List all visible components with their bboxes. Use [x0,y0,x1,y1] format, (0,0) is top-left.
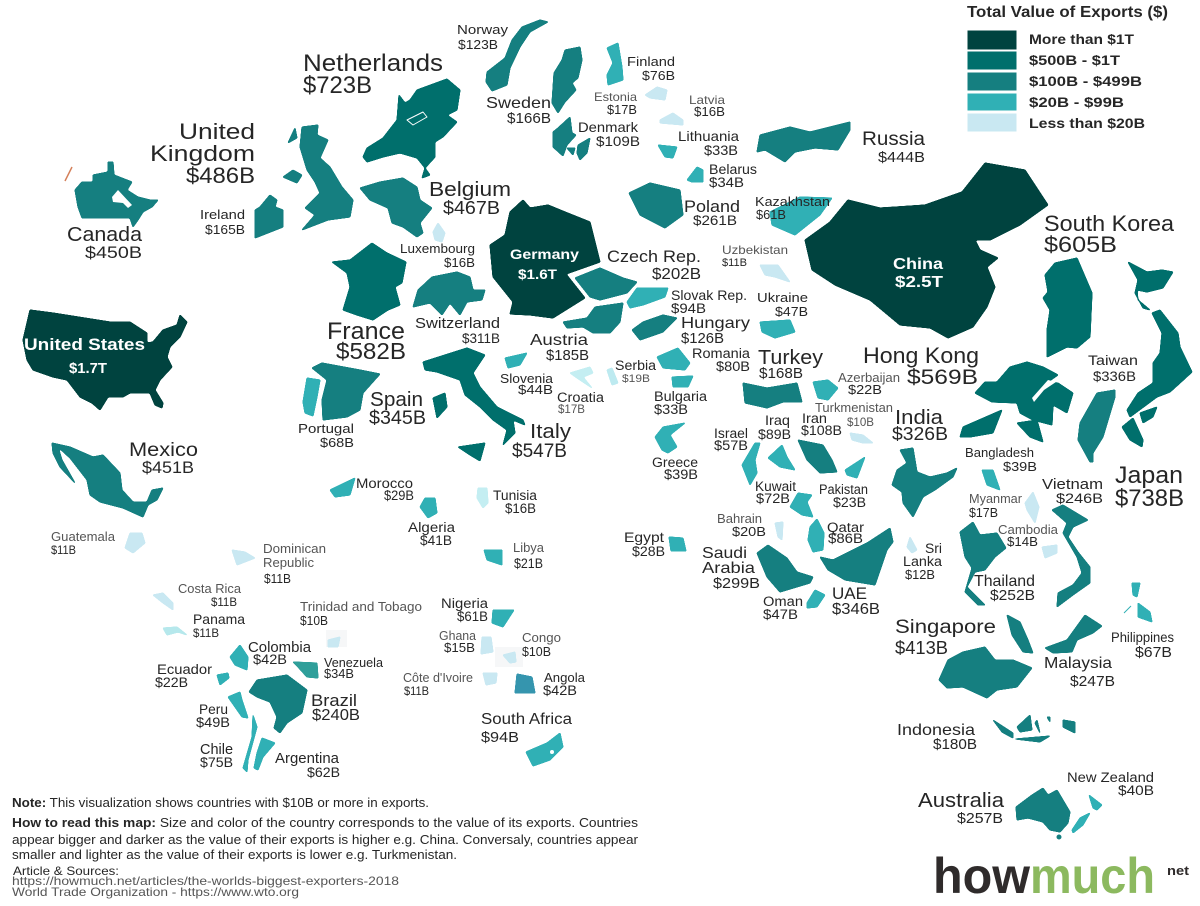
country: Australia: Australia [918,790,1005,812]
country: Poland: $261B [693,212,737,228]
country: Poland [629,183,740,228]
country: Ghana: Ghana [439,629,476,643]
country: Turkey [743,347,823,408]
country: Canada: Canada [67,224,143,246]
country: Thailand: Thailand [974,573,1035,590]
country: Brazil: Brazil [311,691,357,710]
country: Netherlands: $723B [303,72,372,99]
country: Algeria [408,498,456,548]
country: Belarus: Belarus [709,162,757,177]
country: Luxembourg: $16B [444,255,475,270]
country: Bangladesh [965,445,1037,490]
legend [967,4,1168,131]
country: Ukraine: $47B [775,304,808,319]
how to read this map: smaller and lighter as the value of their exports is lower e.g. Turkmenistan. [12,848,457,862]
country: Bulgaria: $33B [654,402,688,417]
country: Libya: $21B [514,556,543,571]
country: Venezuela: Venezuela [324,655,384,670]
country: Indonesia: Indonesia [897,722,975,739]
country: New Zealand: $40B [1118,783,1154,798]
country: Ghana: $15B [444,640,475,655]
country: Sri Lanka: $12B [905,567,935,582]
country: Turkmenistan: $10B [847,415,874,429]
country: Sweden: $166B [507,110,551,127]
country: Mexico [52,440,198,517]
country: Romania: $80B [716,359,750,374]
country: Azerbaijan: Azerbaijan [838,371,900,385]
legend: $500B - $1T [1029,53,1121,68]
country: Bahrain: $20B [732,524,766,539]
country: Netherlands [303,50,460,178]
country: Sweden: Sweden [486,95,551,112]
country: China: China [893,256,943,273]
country: Czech Republic: Czech Rep. [607,248,701,266]
country: Japan: $738B [1115,485,1184,512]
country: Slovenia: $44B [518,382,553,397]
country: Canada [65,162,158,262]
country: Iran [798,410,842,473]
country: Belarus [687,162,757,190]
country: Philippines: Philippines [1111,630,1174,645]
country: Dominican Republic: $11B [264,572,291,586]
country: Hong Kong [863,343,1073,442]
country: Nigeria: Nigeria [441,596,489,611]
country: Congo: $10B [522,644,551,659]
country: Turkey: Turkey [758,347,823,369]
country: Kazakhstan: Kazakhstan [755,194,830,209]
country: Czech Republic [575,248,701,300]
country: Ukraine [757,290,808,338]
country: Russia [757,122,925,166]
country: Latvia: Latvia [689,93,725,107]
country: Kuwait [755,479,813,517]
country: Congo [495,631,561,667]
country: Egypt: Egypt [624,529,664,545]
country: Lithuania: Lithuania [678,128,739,144]
country: Colombia: Colombia [248,640,312,656]
country: Malaysia: $247B [1070,673,1115,690]
country: Hong Kong: $569B [907,366,978,389]
country: China [805,163,1048,338]
country: Côte d'Ivoire: $11B [404,684,429,698]
country: Dominican Republic: Republic [263,556,314,570]
country: Kuwait: Kuwait [755,479,796,494]
country: Ghana [439,629,493,655]
country: Brazil: $240B [312,707,360,724]
country: Norway: Norway [457,22,509,37]
country: Poland: Poland [684,197,740,216]
country: United Kingdom [150,119,353,230]
country: South Korea: South Korea [1044,211,1175,236]
country: Colombia: $42B [253,651,287,667]
country: South Africa [481,711,572,766]
country: Cambodia: $14B [1007,534,1038,549]
logo: howmuch.net [933,848,1190,904]
country: Argentina: Argentina [275,751,340,767]
country: Saudi Arabia [702,545,813,592]
country: Libya [484,541,544,571]
country: Indonesia [897,715,1075,753]
country: Russia: $444B [878,149,925,166]
country: Venezuela [293,655,384,681]
country: Ukraine: Ukraine [757,290,808,305]
country: Luxembourg [400,223,475,270]
country: Sri Lanka [903,537,943,582]
legend: Less than $20B [1029,116,1145,131]
country: Latvia: $16B [694,104,725,119]
country: Hungary: $126B [681,330,724,347]
country: Germany: Germany [510,246,579,262]
country: Nigeria [441,596,514,627]
country: Belarus: $34B [709,175,744,190]
country: Tunisia [477,488,537,516]
country: Canada: $450B [85,243,142,262]
country: Morocco [330,476,414,503]
country: Japan [1115,262,1192,512]
country: Philippines: $67B [1135,644,1172,661]
country: Qatar: Qatar [827,520,865,535]
country: Greece [652,423,698,482]
legend: $100B - $499B [1029,74,1142,89]
country: Bulgaria: Bulgaria [654,389,708,404]
country: Pakistan [819,457,868,510]
country: Cambodia: Cambodia [998,522,1059,537]
country: Austria: $185B [546,347,589,364]
country: Myanmar [969,491,1039,523]
country: Tunisia: $16B [505,501,536,516]
country: Saudi Arabia: Saudi [702,545,747,562]
country: Kazakhstan [755,194,832,235]
country: Iraq: Iraq [765,412,790,428]
country: Malaysia [1044,615,1115,690]
country: Morocco: $29B [384,488,414,503]
country: Australia: $257B [957,810,1003,827]
country: Bangladesh: $39B [1003,459,1037,474]
country: Turkey: $168B [759,365,803,382]
country: Uzbekistan: $11B [722,257,747,269]
country: France: $582B [336,338,406,364]
country: Serbia: $19B [622,373,650,385]
country: South Korea [1043,211,1175,357]
how to read this map: How to read this map: Size and color of the country corresponds to the value of its exports. Countries [12,816,638,830]
country: Libya: Libya [513,541,544,555]
country: Taiwan: Taiwan [1088,353,1138,368]
how to read this map [12,816,638,862]
country: Germany [490,200,600,318]
country: Congo: Congo [522,631,561,645]
country: Turkmenistan [815,400,893,443]
logo: howmuch.net: much [1030,848,1155,904]
country: Greece: $39B [664,467,698,482]
country: Portugal: Portugal [298,421,354,436]
country: Romania [657,346,751,374]
country: Peru: Peru [199,702,228,717]
country: Slovak Republic: $94B [671,300,706,316]
country: Costa Rica [153,582,241,610]
country: Slovak Republic: Slovak Rep. [671,287,747,303]
country: Chile [200,715,257,772]
country: Turkmenistan: Turkmenistan [815,400,893,415]
country: Pakistan: Pakistan [819,482,868,497]
country: China: $2.5T [895,274,943,291]
country: Ireland: $165B [205,222,245,237]
country: Austria: Austria [530,332,588,349]
country: Israel [714,426,760,485]
country: Angola: $42B [543,683,577,698]
country: Iraq: $89B [758,427,791,442]
country: Qatar [808,519,865,552]
country: Iraq [758,412,795,470]
country: Serbia: Serbia [615,358,657,373]
country: Trinidad and Tobago: Trinidad and Tobago [300,600,422,614]
country: Philippines [1111,583,1174,661]
country: Lithuania: $33B [704,142,738,158]
country: Finland: Finland [627,54,675,69]
country: Panama: Panama [193,611,245,627]
country: India: India [895,407,944,429]
country: Greece: Greece [652,455,698,470]
article and sources: https://howmuch.net/articles/the-worlds-biggest-exporters-2018 [12,874,399,888]
country: Saudi Arabia: $299B [713,575,760,592]
country: Singapore: $413B [895,638,948,658]
country: Trinidad and Tobago [300,600,422,647]
country: Algeria: Algeria [408,520,456,535]
country: Germany: $1.6T [518,266,557,282]
country: Israel: Israel [714,426,748,441]
country: Ecuador: $22B [155,675,188,690]
country: Bahrain: Bahrain [717,511,762,526]
country: Estonia [594,87,667,117]
logo: howmuch.net: net [1167,863,1190,878]
country: Pakistan: $23B [833,495,866,510]
country: Singapore [895,615,1033,698]
country: Oman: Oman [763,594,803,609]
article and sources [12,864,399,899]
country: Morocco: Morocco [356,476,413,491]
country: Guatemala: $11B [51,543,76,557]
country: France: France [327,318,405,345]
country: Belgium: Belgium [429,179,511,201]
country: Slovenia: Slovenia [500,371,554,386]
country: Ecuador [155,662,229,690]
country: Egypt [624,529,686,559]
country: Singapore: Singapore [895,617,996,638]
country: Myanmar: $17B [969,505,998,520]
country: Indonesia: $180B [933,736,977,753]
country: Vietnam: $246B [1056,490,1103,506]
country: Azerbaijan [813,371,900,400]
country: Australia [918,788,1070,839]
country: Norway [457,20,548,91]
country: Kuwait: $72B [756,491,790,506]
country: Cambodia [998,522,1059,558]
country: Nigeria: $61B [457,609,488,624]
country: Taiwan [1078,353,1138,462]
country: Argentina: $62B [307,764,340,780]
country: United Kingdom: Kingdom [150,141,255,166]
country: Qatar: $86B [828,531,863,546]
country: Angola [515,670,586,698]
country: Sri Lanka: Lanka [903,554,943,569]
logo: howmuch.net: how [933,848,1030,904]
country: India [892,407,957,517]
country: Malaysia: Malaysia [1044,655,1112,672]
country: Luxembourg: Luxembourg [400,242,475,256]
country: United States: United States [24,335,145,354]
country: Romania: Romania [692,346,751,361]
country: South Korea: $605B [1044,232,1117,257]
country: Italy: Italy [530,421,571,443]
country: Ecuador: Ecuador [157,662,213,677]
country: Estonia: $17B [607,102,637,117]
country: Spain [312,363,426,429]
country: Croatia: $17B [558,404,585,416]
country: Peru: $49B [196,715,230,730]
country: UAE [820,528,893,618]
country: Costa Rica: Costa Rica [178,582,241,596]
country: Croatia: Croatia [557,390,605,405]
country: Myanmar: Myanmar [969,491,1023,506]
country: France [327,243,406,364]
country: Thailand: $252B [990,587,1035,604]
country: Taiwan: $336B [1093,369,1136,384]
country: Venezuela: $34B [324,666,354,681]
country: Tunisia: Tunisia [493,488,537,503]
country: United Kingdom: $486B [186,163,255,188]
country: Croatia [557,367,605,416]
country: Guatemala [51,530,145,557]
country: Panama [163,611,245,640]
country: Switzerland: $311B [462,330,500,346]
country: Belgium [360,178,511,237]
country: Switzerland: Switzerland [415,315,500,332]
article and sources: Article & Sources: [13,864,119,878]
country: Iran: $108B [801,423,842,438]
legend: $20B - $99B [1029,95,1124,110]
country: Denmark [553,117,640,160]
country: Saudi Arabia: Arabia [702,560,755,577]
country: Portugal: $68B [320,435,354,450]
country: Dominican Republic: Dominican [263,542,326,556]
country: Chile: $75B [200,754,233,770]
country: Sri Lanka: Sri [925,541,942,556]
country: Denmark: $109B [596,133,640,149]
country: Vietnam [1042,476,1103,607]
country: Portugal [298,378,354,450]
country: Côte d'Ivoire [403,671,497,698]
country: Slovenia [500,353,554,397]
country: New Zealand [1067,770,1154,833]
country: Bahrain [717,511,783,540]
country: Finland: $76B [642,68,675,83]
country: Panama: $11B [193,626,219,640]
country: Lithuania [658,128,739,158]
country: Peru [196,692,248,730]
country: Switzerland [413,272,500,346]
country: Côte d'Ivoire: Côte d'Ivoire [403,671,473,685]
country: Thailand [960,522,1035,605]
country: Latvia [660,93,725,125]
country: Hungary [632,315,750,347]
country: Spain: Spain [370,389,423,411]
country: Austria [530,303,623,364]
article and sources: World Trade Organization - https://www.wto.org [12,885,299,899]
note: Note: This visualization shows countries with $10B or more in exports. [12,796,429,810]
country: Bangladesh: Bangladesh [965,445,1034,460]
country: Kazakhstan: $61B [756,207,786,222]
country: Norway: $123B [458,37,498,52]
country: Argentina [254,738,340,780]
country: South Africa: South Africa [481,711,572,728]
country: Bulgaria [654,376,708,417]
country: Italy: $547B [512,441,567,462]
country: United States [23,310,187,410]
country: Denmark: Denmark [578,119,639,135]
legend: More than $1T [1029,32,1135,47]
country: UAE: $346B [832,601,880,618]
country: Guatemala: Guatemala [51,530,115,544]
country: Uzbekistan: Uzbekistan [722,243,788,257]
country: Chile: Chile [200,742,233,758]
country: Italy [423,348,571,462]
country: Dominican Republic [232,542,326,586]
country: Belgium: $467B [443,198,500,218]
country: Ireland [200,195,283,238]
country: Iran: Iran [802,410,827,426]
country: Hong Kong: Hong Kong [863,343,979,368]
country: United States: $1.7T [69,360,107,377]
how to read this map: appear bigger and darker as the value of their exports is higher e.g. China. Conversaly, countries appear [12,833,638,847]
country: Egypt: $28B [632,543,665,559]
country: India: $326B [892,424,948,444]
country: Mexico: $451B [142,458,194,477]
country: Ireland: Ireland [200,207,245,222]
country: New Zealand: New Zealand [1067,770,1154,785]
country: Brazil [249,675,360,733]
country: Slovak Republic [627,287,747,316]
country: Colombia [230,640,312,670]
country: Israel: $57B [714,438,748,453]
country: Vietnam: Vietnam [1042,476,1103,493]
legend: Total Value of Exports ($) [967,4,1168,21]
country: Spain: $345B [369,408,426,429]
country: Czech Republic: $202B [652,266,701,283]
country: Trinidad and Tobago: $10B [300,614,328,628]
country: Oman: $47B [763,607,798,622]
country: Algeria: $41B [420,533,452,548]
country: United Kingdom: United [179,119,255,144]
country: Oman [763,590,825,622]
country: South Africa: $94B [481,729,519,746]
country: UAE: UAE [832,584,867,603]
country: Uzbekistan [722,243,790,282]
country: Angola: Angola [544,670,586,685]
country: Azerbaijan: $22B [848,382,882,397]
country: Mexico: Mexico [129,440,198,461]
country: Estonia: Estonia [594,90,637,104]
country: Sweden [486,47,582,127]
country: Finland [607,43,675,85]
country: Netherlands: Netherlands [303,50,443,77]
country: Hungary: Hungary [681,315,750,332]
country: Costa Rica: $11B [211,595,237,609]
country: Russia: Russia [862,129,925,150]
country: Japan: Japan [1115,462,1183,489]
country: Serbia [607,358,657,385]
